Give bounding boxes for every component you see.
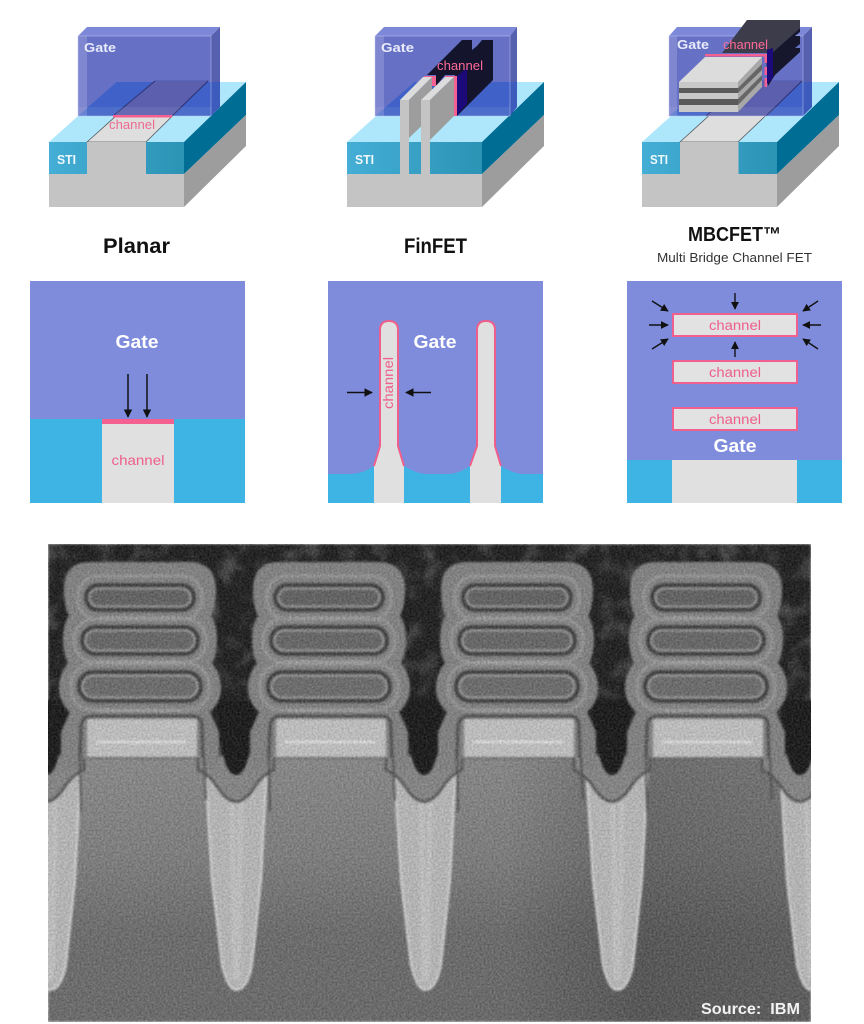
nanosheets — [679, 20, 800, 112]
fins inside gate — [424, 40, 493, 116]
fin left outline — [374, 321, 404, 466]
channel label: channel — [381, 357, 396, 409]
diagram: Planar 3D — [49, 27, 246, 207]
arrows — [649, 293, 821, 357]
base block — [642, 81, 839, 207]
substrate — [48, 744, 811, 1022]
STI label: STI — [355, 152, 374, 167]
channel label: channel — [437, 58, 483, 73]
heading: FinFET: FinFET — [404, 235, 467, 258]
STI label: STI — [57, 152, 76, 167]
panel: FinFET cross-section — [328, 281, 543, 503]
heading: Planar: Planar — [103, 235, 170, 258]
dark upper region — [48, 544, 811, 758]
isolation wedges — [19, 765, 842, 990]
panel: MBCFET cross-section — [627, 281, 842, 503]
channel label: channel — [109, 117, 155, 132]
photo: IBM nanosheet transistor micrograph — [8, 544, 842, 1022]
channel body — [102, 419, 174, 503]
source credit: Source: IBM — [701, 1001, 800, 1018]
channel line — [113, 115, 172, 118]
channel 2: channel — [709, 365, 761, 380]
fin 2 — [421, 77, 454, 175]
gate label: Gate — [414, 332, 456, 352]
channel strip — [102, 419, 174, 424]
gate label: Gate — [116, 332, 158, 352]
arrow right — [406, 392, 431, 394]
heading: MBCFET: MBCFET™ — [688, 224, 781, 246]
base block — [49, 81, 246, 207]
gate box — [669, 27, 812, 116]
fin right — [470, 321, 501, 503]
gate box — [78, 27, 220, 116]
film grain — [48, 544, 811, 1022]
fin 1 — [400, 77, 432, 175]
gate-all-around stacks — [59, 562, 787, 812]
channel 1: channel — [709, 318, 761, 333]
channel 3 — [673, 408, 797, 430]
channel 1 — [673, 314, 797, 336]
gate label: Gate — [381, 40, 414, 55]
panel: Planar cross-section — [30, 281, 245, 503]
channel 3: channel — [709, 412, 761, 427]
arrow left — [347, 392, 372, 394]
gate label: Gate — [714, 436, 756, 456]
gate label: Gate — [84, 40, 116, 55]
channel label: channel — [723, 37, 768, 52]
arrows — [128, 374, 147, 417]
gate troughs between stacks — [8, 700, 838, 802]
subheading: Multi Bridge Channel FET: Multi Bridge Channel FET — [657, 250, 812, 265]
STI wells — [328, 466, 543, 503]
channel 2 — [673, 361, 797, 383]
diagram: FinFET 3D — [347, 27, 544, 207]
fin right outline — [470, 321, 501, 466]
gate box — [375, 27, 517, 116]
diagram: MBCFET 3D — [642, 20, 839, 207]
channel label: channel — [112, 453, 164, 468]
STI label: STI — [650, 152, 668, 167]
gate label: Gate — [677, 37, 709, 52]
base block — [347, 82, 544, 207]
fin left — [374, 321, 404, 503]
